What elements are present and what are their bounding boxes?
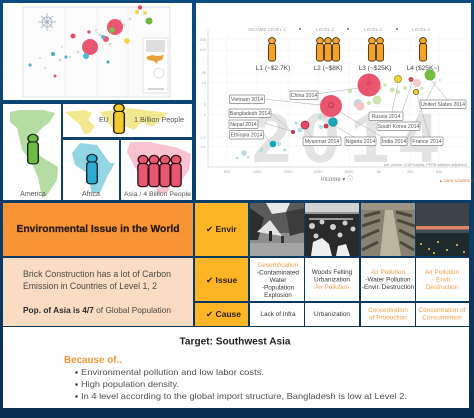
- panel: brick construction summary: Brick Construction has a lot of Carbon: [23, 269, 171, 279]
- issue cell: column 4: - Envir.: [432, 276, 452, 284]
- country labels: United States 2014: [421, 102, 465, 108]
- income level labels: L1 (~$2.7K): [256, 65, 290, 72]
- issue cell: column 3: -Envir. Destruction: [362, 284, 415, 291]
- panel: brick construction summary: [3, 258, 193, 326]
- panel: brick construction summary: Emission in Countries of Level 1, 2: [23, 281, 157, 291]
- photo: city at dusk: [416, 203, 469, 256]
- chart grid and axes: 0.2: [200, 135, 207, 140]
- chart grid and axes: 500: [224, 169, 231, 174]
- country labels: [229, 91, 466, 146]
- panel: brick construction summary: Pop. of Asia is 4/7 of Global Population: [23, 305, 171, 315]
- icon: compass rose: [38, 13, 56, 31]
- row label: Envir: ✔ Envir: [206, 224, 237, 234]
- photo: brick fields: [361, 203, 415, 256]
- label: EU: EU: [99, 117, 109, 124]
- icon: yellow person: [114, 104, 124, 133]
- cause cell: Concentration of Production: of Production: [369, 314, 407, 322]
- map legend panel: [143, 38, 168, 93]
- data source note: per person (GDP/capita, PPP$ inflation-adjusted): [384, 163, 468, 167]
- level headings: [248, 27, 430, 32]
- country labels: Bangladesh 2014: [230, 111, 270, 117]
- level headings: INCOME LEVEL 1: [248, 27, 286, 32]
- chart grid and axes: 0.1: [200, 144, 207, 149]
- chart grid and axes: 1000: [253, 169, 262, 174]
- country labels: Ethiopia 2014: [231, 133, 262, 139]
- panel: income level bubble chart: [196, 3, 473, 200]
- income level labels: L3 (~$25K): [359, 65, 391, 72]
- cause cell: Urbanization: Urbanization: [314, 311, 350, 318]
- country labels: India 2014: [382, 139, 406, 145]
- chart grid and axes: 8k: [377, 169, 381, 174]
- chart grid and axes: [199, 30, 470, 174]
- chart grid and axes: 4000: [314, 169, 323, 174]
- issue cell: column 3: Air Pollution: [371, 269, 405, 276]
- issue cell: column 3: -Water Pollution: [365, 276, 411, 284]
- cause cell: Lack of Infra: [250, 303, 304, 326]
- issue cell: column 4: Air Pollution: [425, 269, 459, 276]
- panel: Asia population: [121, 140, 192, 200]
- chart grid and axes: 100: [199, 47, 207, 52]
- cause cell: Concentration of Consumerism: [416, 303, 469, 326]
- cause cell: Concentration of Consumerism: Consumerism: [422, 314, 462, 322]
- heading panel: Environmental Issue in the World: Environmental Issue in the World: [16, 223, 180, 235]
- icon: blue person: [87, 154, 97, 184]
- issue cell: column 3: [361, 258, 415, 301]
- row label: Cause: ✔ Cause: [206, 309, 241, 319]
- country labels: Nepal 2014: [230, 122, 257, 128]
- issue cell: column 2: Urbanization: [314, 276, 350, 284]
- row label: Cause: [195, 303, 248, 326]
- cause cell: Lack of Infra: Lack of Infra: [260, 311, 296, 318]
- country labels: China 2014: [291, 93, 317, 99]
- map: world in yellow: [65, 108, 168, 134]
- country labels: Myanmar 2014: [305, 139, 339, 145]
- row label: Issue: ✔ Issue: [206, 275, 237, 285]
- subheading: because of: Because of..: [64, 355, 122, 366]
- chart grid and axes: 200: [199, 37, 207, 42]
- label: America: America: [20, 191, 46, 198]
- label: Africa: Africa: [82, 191, 100, 198]
- map: Americas: [10, 110, 58, 198]
- country labels: France 2014: [412, 139, 442, 145]
- row label: Envir: [195, 203, 248, 256]
- issue cell: column 2: [305, 258, 359, 301]
- heading panel: Environmental Issue in the World: [3, 203, 193, 256]
- x axis title: Income ▾ ⓘ: [321, 175, 353, 183]
- panel: EU population: [63, 104, 192, 137]
- cause cell: Concentration of Consumerism: Concentration of: [419, 307, 466, 314]
- country labels: Vietnam 2014: [231, 97, 263, 103]
- reasons list: [75, 368, 407, 401]
- income level labels: L4 ($25K~): [407, 65, 439, 72]
- icon: four red people: [138, 155, 181, 187]
- world map bubbles: [28, 5, 152, 77]
- chart grid and axes: 1: [204, 112, 207, 117]
- bubbles: [236, 70, 441, 159]
- chart grid and axes: 2: [204, 102, 207, 107]
- panel: world income bubble map: [3, 3, 192, 100]
- issue cell: column 4: [416, 258, 469, 301]
- watermark year 2014: 2014: [252, 99, 438, 177]
- issue cell: column 1: Water: [270, 277, 287, 284]
- issue cell: column 1: [250, 258, 304, 301]
- chart grid and axes: 2000: [284, 169, 293, 174]
- icons: orange people by income level: [268, 37, 427, 61]
- level headings: LEVEL 2: [316, 27, 334, 32]
- reasons list: Environmental pollution and low labor costs.: [81, 368, 264, 377]
- chart grid and axes: 6000: [345, 169, 354, 174]
- level headings: LEVEL 4: [412, 27, 430, 32]
- issue cell: column 4: Destruction: [426, 284, 459, 291]
- issue cell: column 2: Woods Felling: [312, 269, 353, 276]
- chart grid and axes: 32k: [407, 169, 413, 174]
- heading: target: Target: Southwest Asia: [180, 336, 291, 348]
- photo: crowd and urbanization: [305, 203, 359, 256]
- country labels: Russia 2014: [372, 114, 401, 120]
- map: Africa: [72, 143, 115, 193]
- issue cell: column 1: Explosion: [264, 292, 292, 299]
- cause cell: Concentration of Production: [361, 303, 415, 326]
- issue cell: column 1: -Contaminated: [257, 270, 299, 276]
- issue cell: column 1: Desertification: [258, 262, 299, 269]
- panel: America population: [3, 104, 61, 200]
- chart grid and axes: 64k: [436, 169, 442, 174]
- label: Asia / 4 Billion People: Asia / 4 Billion People: [124, 191, 191, 198]
- leader lines: [264, 80, 450, 143]
- row label: Issue: [195, 258, 248, 301]
- issue cell: column 1: -Population: [262, 284, 295, 292]
- chart grid and axes: 20: [202, 70, 207, 75]
- income level labels: [256, 65, 439, 72]
- photo: desertification: [250, 203, 304, 256]
- country labels: Nigeria 2014: [346, 139, 375, 145]
- reasons list: In 4 level according to the global import structure, Bangladesh is low at Level 2.: [81, 392, 407, 401]
- data source link: ▲ DATA SOURCES: [439, 179, 473, 183]
- map: Asia: [127, 142, 191, 194]
- label: 1 Billion People: 1 Billion People: [134, 115, 184, 124]
- icon: green person: [28, 134, 38, 164]
- panel: Africa population: [63, 140, 119, 200]
- issue cell: column 2: Air Pollution: [315, 284, 349, 291]
- panel: target conclusion: [3, 327, 469, 408]
- cause cell: Urbanization: [305, 303, 359, 326]
- cause cell: Concentration of Production: Concentration: [368, 307, 408, 314]
- income level labels: L2 (~$8K): [313, 65, 343, 72]
- level headings: LEVEL 3: [364, 27, 382, 32]
- reasons list: High population density.: [81, 380, 179, 389]
- country labels: South Korea 2014: [378, 124, 420, 130]
- chart grid and axes: 10: [202, 80, 207, 85]
